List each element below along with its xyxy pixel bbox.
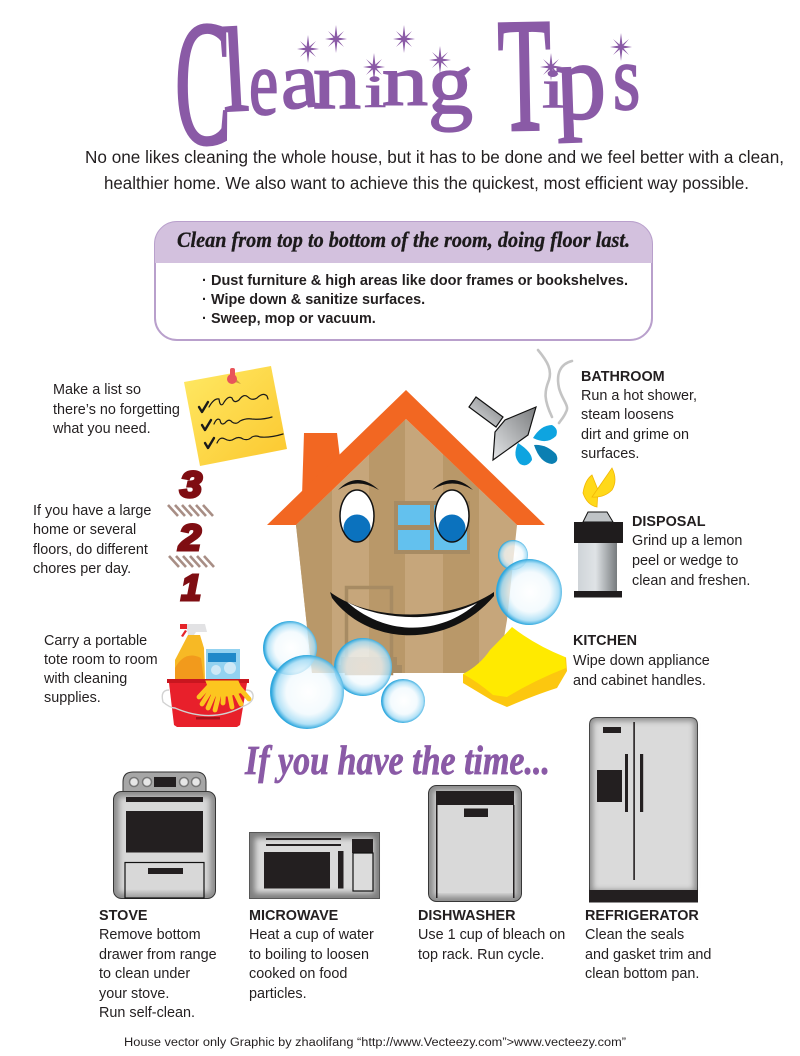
text: microwave xyxy=(249,908,374,1002)
detergent box xyxy=(206,649,240,679)
heading: if you have the time: If you have the time... xyxy=(244,737,550,783)
text: stove xyxy=(99,908,217,1021)
text: microwave: cooked on food xyxy=(249,966,347,982)
title: Cleaning Tips: l xyxy=(218,4,251,138)
text: microwave: particles. xyxy=(249,986,307,1002)
text: dishwasher xyxy=(418,908,565,963)
checklist marks xyxy=(199,394,283,448)
house walls xyxy=(290,415,525,675)
tip text: large home: home or several xyxy=(33,522,136,538)
text: microwave: MICROWAVE xyxy=(249,908,339,924)
text: stove: Remove bottom xyxy=(99,927,201,943)
panel bullet list: Wipe down & sanitize surfaces. xyxy=(211,292,425,308)
text: dishwasher: Use 1 cup of bleach on xyxy=(418,927,565,943)
panel heading: Clean from top to bottom of the room, doing floor last. xyxy=(177,227,630,252)
title: Cleaning Tips: s xyxy=(613,27,640,129)
title: Cleaning Tips: i xyxy=(364,67,386,117)
chimney xyxy=(302,433,340,496)
icon: shower head xyxy=(469,350,572,465)
title: Cleaning Tips: e xyxy=(249,32,278,135)
tip text: kitchen: and cabinet handles. xyxy=(573,673,706,689)
tip text: disposal: Grind up a lemon xyxy=(632,533,742,549)
disposal unit xyxy=(574,512,623,598)
text: refrigerator xyxy=(585,908,711,982)
lemon wedge xyxy=(583,468,615,507)
icon: numbered stairs 3 2 1 xyxy=(168,464,214,608)
tip text: large home: floors, do different xyxy=(33,542,148,558)
icon: yellow sponge xyxy=(463,627,567,707)
icon: sticky note xyxy=(184,366,287,466)
text: microwave: to boiling to loosen xyxy=(249,947,369,963)
spray bottle xyxy=(175,624,207,680)
window xyxy=(394,501,470,554)
intro text: healthier home. We also want to achieve this the quickest, most efficient way possible. xyxy=(104,173,749,193)
push pin xyxy=(227,368,241,384)
panel bullet list: · xyxy=(202,311,207,327)
panel bullet list: · xyxy=(202,292,207,308)
text: microwave: Heat a cup of water xyxy=(249,927,374,943)
panel bullet list: Sweep, mop or vacuum. xyxy=(211,311,376,327)
intro text: No one likes cleaning the whole house, but it has to be done and we feel better with a clean, xyxy=(85,147,784,167)
tip text: portable tote: Carry a portable xyxy=(44,633,147,649)
water drops xyxy=(515,425,557,465)
footer credit: House vector only Graphic by zhaolifang “http://www.Vecteezy.com”>www.vecteezy.com” xyxy=(124,1037,626,1049)
tip text: kitchen xyxy=(573,633,710,689)
text: stove: your stove. xyxy=(99,986,169,1002)
panel header band xyxy=(155,222,652,263)
appliance: refrigerator xyxy=(589,718,698,902)
icon: sparkles xyxy=(297,25,632,81)
text: stove: STOVE xyxy=(99,908,148,924)
tip text: portable tote: with cleaning xyxy=(43,671,127,687)
icon: numbered stairs 3 2 1: 3 xyxy=(180,464,202,505)
panel bullet list: · xyxy=(202,273,207,289)
appliance: microwave xyxy=(250,832,380,898)
steam xyxy=(538,350,572,423)
title: Cleaning Tips: a xyxy=(276,35,322,127)
tip text: bathroom: BATHROOM xyxy=(581,369,665,385)
text: dishwasher: top rack. Run cycle. xyxy=(418,947,544,963)
title: Cleaning Tips: i xyxy=(542,59,565,120)
tip text: make a list: what you need. xyxy=(52,421,151,437)
stove knobs xyxy=(130,778,200,786)
stair hatch lower xyxy=(169,556,214,567)
icon: bucket of cleaning supplies xyxy=(162,624,253,727)
tip text: bathroom: steam loosens xyxy=(581,407,674,423)
icon: numbered stairs 3 2 1: 1 xyxy=(181,567,201,608)
tip text: large home: If you have a large xyxy=(33,503,151,519)
text: refrigerator: REFRIGERATOR xyxy=(585,908,699,924)
text: refrigerator: Clean the seals xyxy=(585,927,684,943)
tip text: make a list: Make a list so xyxy=(53,382,141,398)
icon: disposal with lemon xyxy=(574,468,623,598)
text: refrigerator: and gasket trim and xyxy=(585,947,711,963)
roof xyxy=(267,390,545,525)
stair hatch xyxy=(168,505,213,516)
title: Cleaning Tips: g xyxy=(428,36,473,133)
panel: clean from top to bottom xyxy=(155,222,652,340)
tip text: portable tote: supplies. xyxy=(44,690,101,706)
title: Cleaning Tips: n xyxy=(313,39,361,126)
appliance: dishwasher xyxy=(428,786,522,902)
tip text: disposal: DISPOSAL xyxy=(632,514,706,530)
text: dishwasher: DISHWASHER xyxy=(418,908,516,924)
title: Cleaning Tips: n xyxy=(382,41,428,121)
tip text: kitchen: Wipe down appliance xyxy=(573,653,710,669)
text: stove: to clean under xyxy=(99,966,190,982)
appliance: stove xyxy=(114,772,216,898)
tip text: portable tote: tote room to room xyxy=(44,652,158,668)
tip text: make a list: there’s no forgetting xyxy=(53,402,180,418)
eyebrows xyxy=(338,480,473,490)
tip text: bathroom xyxy=(581,369,697,462)
door xyxy=(336,588,402,674)
yellow gloves xyxy=(199,681,249,710)
text: refrigerator: clean bottom pan. xyxy=(585,966,699,982)
text: stove: drawer from range xyxy=(99,947,217,963)
tip text: disposal xyxy=(632,514,750,589)
soap bubbles xyxy=(263,540,562,729)
tip text: bathroom: dirt and grime on xyxy=(581,427,689,443)
tip text: large home: chores per day. xyxy=(33,561,131,577)
smile xyxy=(330,592,494,635)
tip text: bathroom: Run a hot shower, xyxy=(581,388,697,404)
title: Cleaning Tips xyxy=(175,0,640,183)
tip text: disposal: clean and freshen. xyxy=(632,573,750,589)
text: stove: Run self-clean. xyxy=(99,1005,195,1021)
tip text: disposal: peel or wedge to xyxy=(632,553,738,569)
tip text: kitchen: KITCHEN xyxy=(573,633,637,649)
left eye xyxy=(340,490,374,542)
red bucket xyxy=(162,679,253,727)
title: Cleaning Tips: p xyxy=(554,19,608,143)
tip text: bathroom: surfaces. xyxy=(581,446,639,462)
right eye xyxy=(435,490,469,542)
illustration: smiling house xyxy=(267,390,545,675)
panel bullet list: Dust furniture & high areas like door frames or bookshelves. xyxy=(211,273,628,289)
icon: numbered stairs 3 2 1: 2 xyxy=(178,517,201,558)
